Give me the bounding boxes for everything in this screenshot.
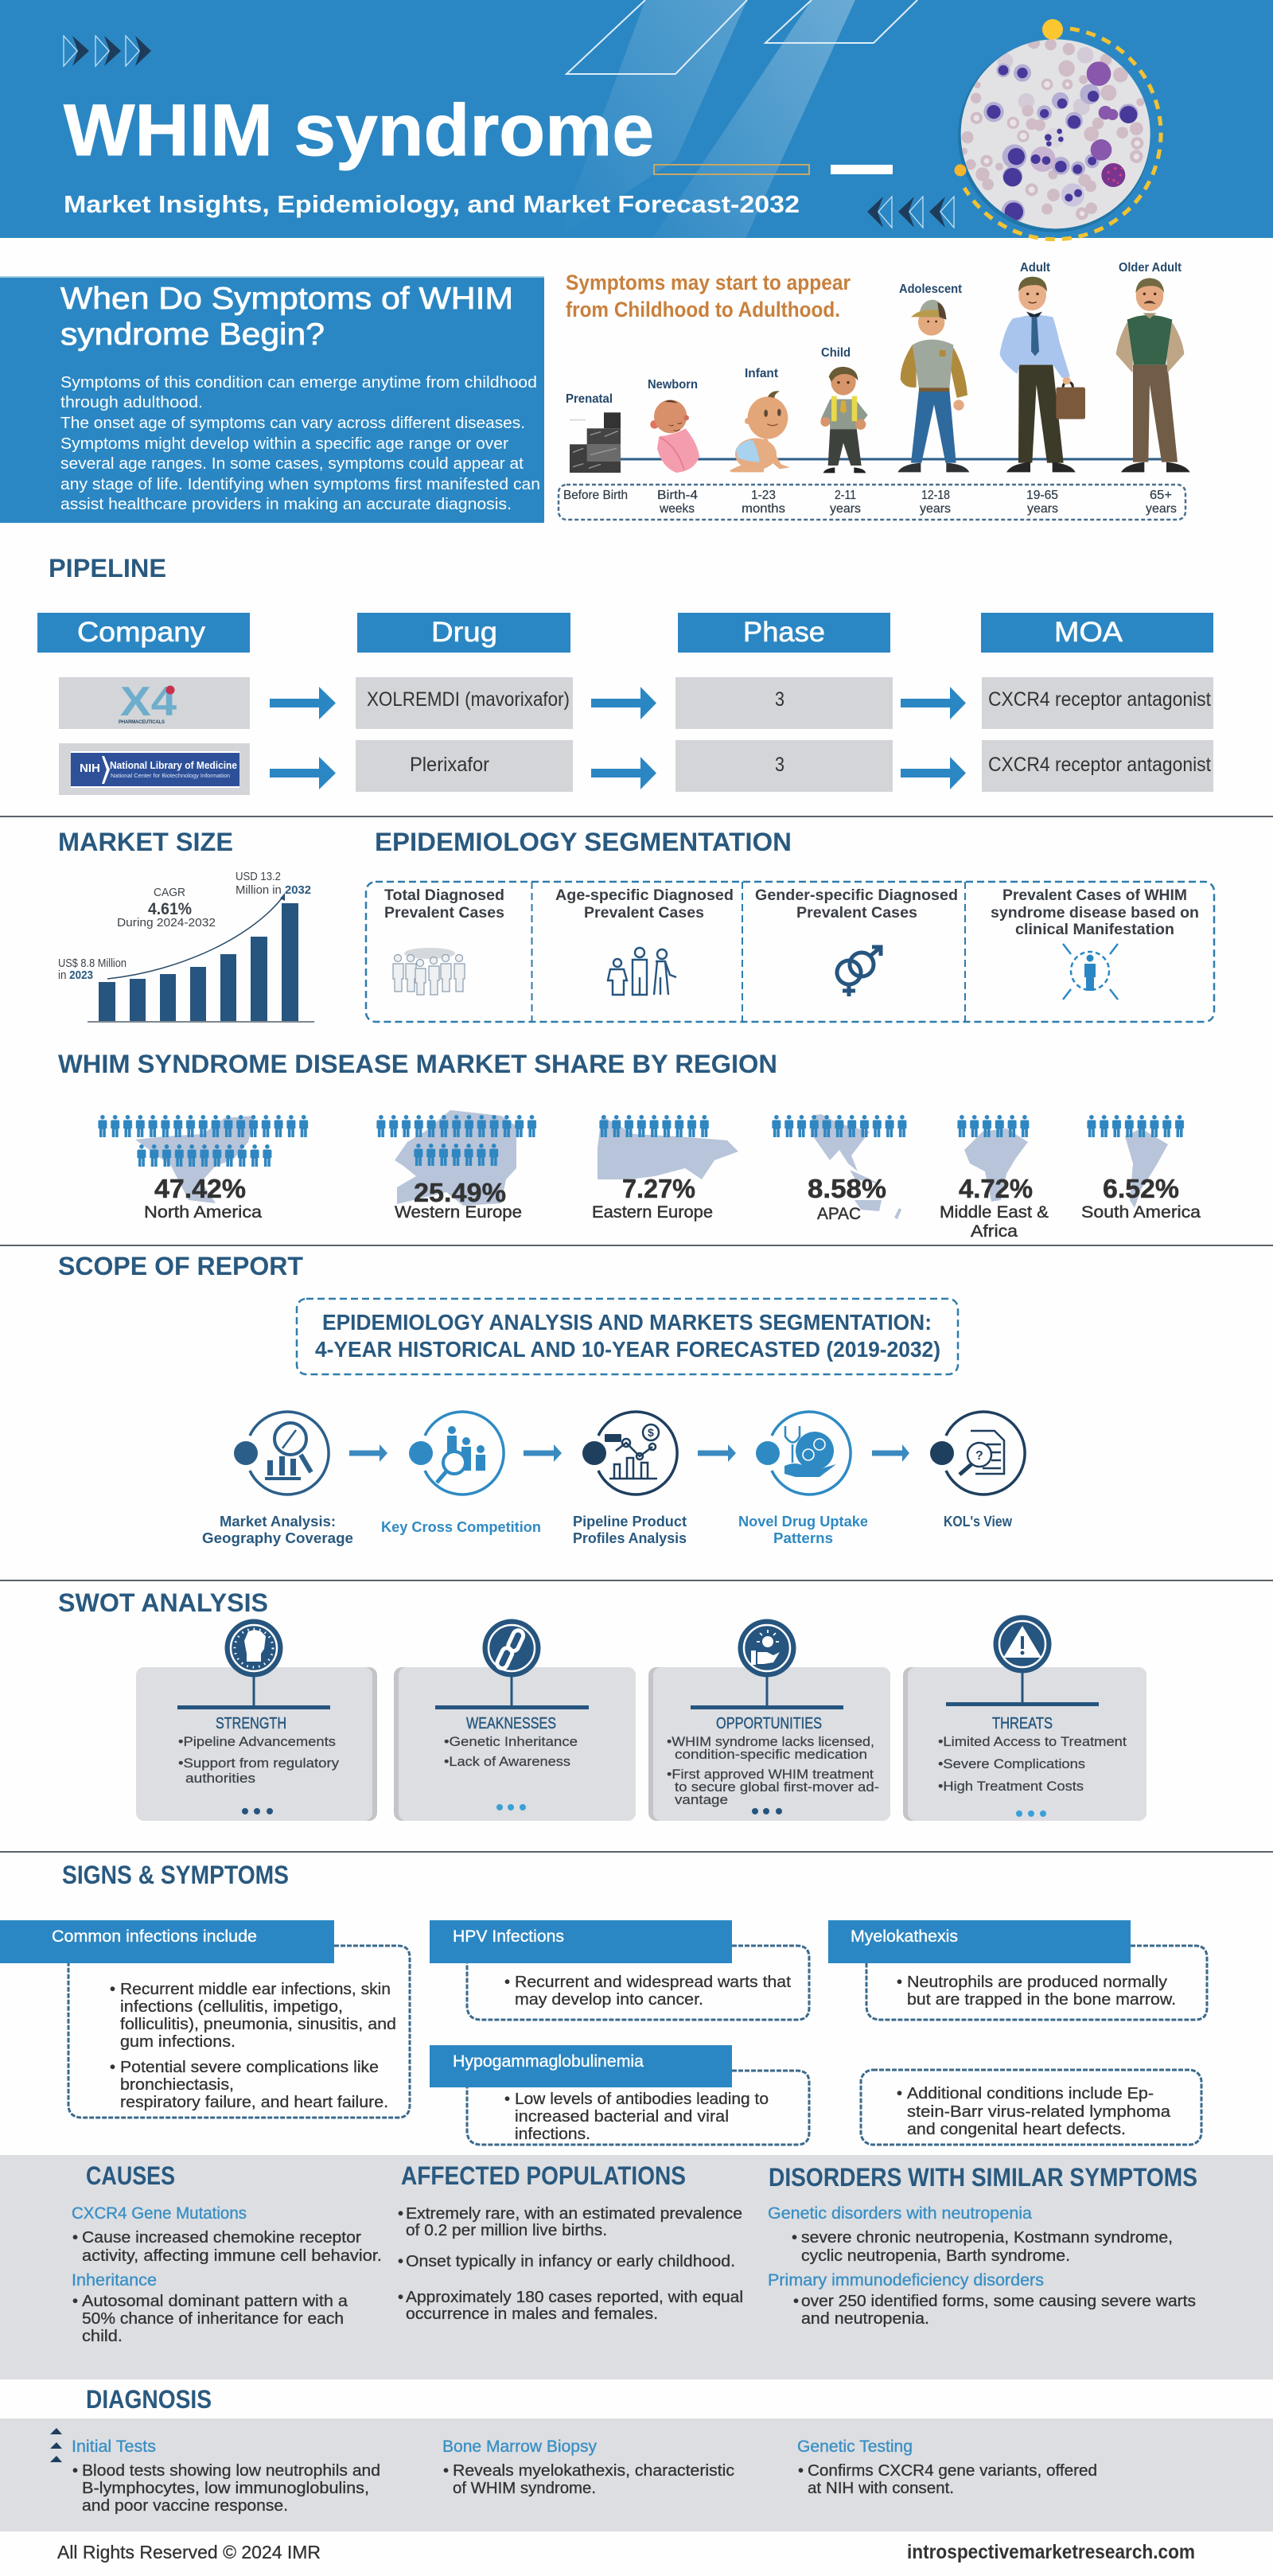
region: South America bbox=[1081, 1174, 1201, 1222]
region: Middle East and Africa: Africa bbox=[971, 1222, 1018, 1241]
icon: broken chain bbox=[482, 1619, 541, 1678]
card: common infections: bronchiectasis, bbox=[120, 2076, 234, 2094]
column: bone marrow biopsy: Reveals myelokathexis, characteristic bbox=[453, 2462, 734, 2480]
card: opportunities: OPPORTUNITIES bbox=[716, 1715, 822, 1732]
scope item: pipeline product profiles bbox=[573, 1412, 687, 1546]
card: weaknesses bbox=[394, 1619, 636, 1821]
bar chart: market size: 4.61% bbox=[148, 900, 192, 918]
bar chart: market size: CAGR bbox=[154, 886, 185, 899]
figure: newborn bbox=[650, 399, 699, 473]
region: North America: North America bbox=[144, 1202, 262, 1222]
column: genetic testing: Genetic Testing bbox=[797, 2438, 913, 2456]
logo: NIH National Library of Medicine bbox=[71, 751, 239, 788]
column: disorders with similar symptoms: DISORDERS WITH SIMILAR SYMPTOMS bbox=[769, 2163, 1197, 2192]
figure: prenatal block bbox=[570, 412, 621, 473]
callout: analysis period: EPIDEMIOLOGY ANALYSIS AND MARKETS SEGMENTATION: bbox=[322, 1310, 932, 1335]
arrow bbox=[872, 1444, 909, 1462]
age ranges dashed box: years bbox=[1027, 502, 1058, 516]
bar chart: market size: US$ 8.8 Million bbox=[58, 957, 127, 970]
card: weaknesses: WEAKNESSES bbox=[466, 1715, 556, 1732]
column: causes: child. bbox=[82, 2328, 123, 2345]
card: hypogammaglobulinemia bbox=[430, 2045, 809, 2145]
column headers: Drug bbox=[431, 617, 497, 648]
card: opportunities: to secure global first-mover ad- bbox=[675, 1780, 879, 1795]
region: Eastern Europe: 7.27% bbox=[622, 1174, 695, 1203]
column headers: Phase bbox=[743, 617, 825, 648]
card: HPV infections: Recurrent and widespread warts that bbox=[515, 1974, 791, 1991]
stage labels: Newborn bbox=[648, 378, 698, 392]
segment titles: Prevalent Cases of WHIM bbox=[1002, 887, 1187, 904]
column: disorders with similar symptoms bbox=[768, 2163, 1197, 2328]
column: causes: • bbox=[72, 2293, 78, 2310]
column: disorders with similar symptoms: • bbox=[792, 2229, 797, 2247]
subtitle: Market Insights, Epidemiology, and Market Forecast-2032 bbox=[64, 190, 800, 218]
card: strength: STRENGTH bbox=[216, 1715, 286, 1732]
scope item: pipeline product profiles: Profiles Analysis bbox=[573, 1530, 687, 1546]
card: HPV infections: may develop into cancer. bbox=[515, 1991, 703, 2009]
age ranges dashed box: years bbox=[920, 502, 951, 516]
card: opportunities: condition-specific medication bbox=[675, 1748, 867, 1762]
card: strength: •Pipeline Advancements bbox=[178, 1735, 336, 1749]
column: initial tests: B-lymphocytes, low immunoglobulins, bbox=[82, 2480, 369, 2497]
panel: when do symptoms begin bbox=[0, 276, 544, 523]
card: opportunities bbox=[648, 1619, 890, 1821]
icon: hand and light bulb bbox=[738, 1619, 796, 1678]
stage labels: Adolescent bbox=[899, 283, 963, 296]
column: genetic testing bbox=[797, 2438, 1097, 2497]
card: hypogammaglobulinemia: infections. bbox=[515, 2126, 590, 2143]
card: threats: •High Treatment Costs bbox=[938, 1779, 1084, 1794]
heading: swot analysis: SWOT ANALYSIS bbox=[58, 1588, 268, 1617]
card: common infections: respiratory failure, and heart failure. bbox=[120, 2094, 388, 2111]
orange callout heading: from Childhood to Adulthood. bbox=[566, 298, 840, 322]
card: HPV infections: HPV Infections bbox=[453, 1927, 564, 1946]
arrows: pipeline flow bbox=[270, 687, 966, 789]
card: myelokathexis bbox=[828, 1920, 1207, 2020]
card: common infections: infections (cellulitis, impetigo, bbox=[120, 1998, 343, 2016]
card: additional conditions: and congenital heart defects. bbox=[907, 2121, 1126, 2138]
scope item: pipeline product profiles: Pipeline Product bbox=[573, 1514, 687, 1530]
age ranges dashed box bbox=[559, 485, 1185, 520]
column: disorders with similar symptoms: over 250 identified forms, some causing severe warts bbox=[801, 2293, 1196, 2310]
panel: regional market share bbox=[96, 1110, 1201, 1241]
region: North America: 47.42% bbox=[154, 1174, 246, 1203]
column: bone marrow biopsy: • bbox=[443, 2462, 449, 2480]
column: causes: activity, affecting immune cell behavior. bbox=[82, 2247, 382, 2265]
scope item: key cross competition bbox=[381, 1412, 541, 1535]
region: APAC: 8.58% bbox=[808, 1174, 886, 1203]
icon: age groups family bbox=[608, 948, 676, 995]
card: threats bbox=[903, 1615, 1146, 1821]
bar chart: market size: Million in 2032 bbox=[236, 883, 311, 897]
scope item: KOL view: ? bbox=[975, 1449, 983, 1463]
scope item: market analysis: Geography Coverage bbox=[202, 1530, 353, 1546]
card: hypogammaglobulinemia: Hypogammaglobulinemia bbox=[453, 2052, 644, 2071]
heading: signs and symptoms: SIGNS & SYMPTOMS bbox=[62, 1861, 289, 1889]
card: hypogammaglobulinemia: • bbox=[504, 2091, 510, 2108]
card: common infections: Recurrent middle ear infections, skin bbox=[120, 1981, 391, 1998]
card: additional conditions: • bbox=[897, 2085, 902, 2102]
card: myelokathexis: Neutrophils are produced normally bbox=[907, 1974, 1167, 1991]
figure: child bbox=[820, 367, 868, 473]
age ranges dashed box: 12-18 bbox=[921, 489, 950, 502]
arrow bbox=[698, 1444, 736, 1462]
age ranges dashed box: Birth-4 bbox=[657, 489, 698, 502]
stage labels bbox=[566, 261, 1182, 406]
column: initial tests: Blood tests showing low neutrophils and bbox=[82, 2462, 380, 2480]
card: HPV infections: • bbox=[504, 1974, 510, 1991]
column: causes: 50% chance of inheritance for each bbox=[82, 2310, 344, 2328]
icon: crowd bbox=[393, 948, 465, 995]
column: disorders with similar symptoms: • bbox=[793, 2293, 799, 2310]
footer: introspectivemarketresearch.com bbox=[907, 2541, 1195, 2563]
column: genetic testing: at NIH with consent. bbox=[808, 2480, 954, 2497]
panel body text: assist healthcare providers in making an accurate diagnosis. bbox=[60, 495, 512, 513]
age ranges dashed box: weeks bbox=[659, 502, 695, 516]
panel body text: any stage of life. Identifying when symptoms first manifested can bbox=[60, 475, 540, 493]
card: common infections: gum infections. bbox=[120, 2033, 236, 2051]
orange callout heading: Symptoms may start to appear bbox=[566, 271, 851, 294]
row: NIH bbox=[59, 740, 1213, 795]
orange callout heading bbox=[566, 271, 851, 322]
age ranges dashed box: years bbox=[1146, 502, 1177, 516]
region: APAC: APAC bbox=[817, 1204, 861, 1223]
card: threats: •Severe Complications bbox=[938, 1757, 1085, 1771]
scope item: market analysis bbox=[202, 1412, 353, 1546]
heading: epidemiology segmentation: EPIDEMIOLOGY SEGMENTATION bbox=[375, 828, 792, 856]
row: NIH: 3 bbox=[775, 754, 784, 776]
panel body text: Symptoms of this condition can emerge anytime from childhood bbox=[60, 373, 537, 392]
card: myelokathexis: • bbox=[897, 1974, 902, 1991]
logo: NIH National Library of Medicine: National Center for Biotechnology Information bbox=[111, 774, 230, 779]
column: bone marrow biopsy bbox=[442, 2438, 734, 2497]
scope item: KOL view bbox=[930, 1412, 1025, 1530]
card: additional conditions: stein-Barr virus-related lymphoma bbox=[907, 2103, 1171, 2121]
segment titles bbox=[384, 887, 1199, 938]
column: affected populations: Extremely rare, with an estimated prevalence bbox=[406, 2205, 742, 2223]
scope item: novel drug uptake patterns: Novel Drug Uptake bbox=[738, 1514, 868, 1530]
column: disorders with similar symptoms: Genetic disorders with neutropenia bbox=[768, 2204, 1032, 2223]
row: X4 Pharmaceuticals: 3 bbox=[775, 688, 784, 711]
column: causes bbox=[72, 2161, 382, 2345]
icon: left chevrons bbox=[867, 197, 954, 228]
card: threats: •Limited Access to Treatment bbox=[938, 1735, 1127, 1749]
panel: epidemiology segmentation bbox=[366, 882, 1214, 1022]
panel heading bbox=[60, 282, 513, 352]
age ranges dashed box: Before Birth bbox=[563, 489, 628, 502]
card: common infections: Common infections include bbox=[52, 1927, 257, 1946]
callout: analysis period bbox=[297, 1299, 958, 1374]
icon: person in circle bbox=[1063, 944, 1118, 1000]
row: X4 Pharmaceuticals: CXCR4 receptor antagonist bbox=[988, 688, 1211, 711]
footer bbox=[57, 2541, 1195, 2563]
column: causes: • bbox=[72, 2229, 78, 2247]
age ranges dashed box: years bbox=[830, 502, 861, 516]
figure: adolescent bbox=[897, 300, 969, 472]
card: additional conditions bbox=[861, 2070, 1201, 2145]
column headers: Company bbox=[77, 617, 206, 648]
people pictograms bbox=[96, 1115, 1185, 1167]
figure: adult bbox=[1000, 277, 1085, 472]
card: opportunities: •WHIM syndrome lacks licensed, bbox=[667, 1735, 874, 1749]
card: opportunities: vantage bbox=[675, 1793, 728, 1807]
card: common infections: • bbox=[110, 2059, 115, 2076]
card: strength bbox=[136, 1619, 377, 1821]
card: common infections: folliculitis), pneumonia, sinusitis, and bbox=[120, 2016, 396, 2033]
column: causes: Autosomal dominant pattern with a bbox=[82, 2293, 348, 2310]
region: Western Europe bbox=[395, 1178, 522, 1222]
card: common infections: • bbox=[110, 1981, 115, 1998]
column: affected populations: of 0.2 per million live births. bbox=[406, 2222, 607, 2239]
scope item: novel drug uptake patterns: Patterns bbox=[773, 1530, 833, 1546]
bar chart: market size: USD 13.2 bbox=[236, 870, 281, 883]
region: Western Europe: Western Europe bbox=[395, 1202, 522, 1222]
column: initial tests bbox=[72, 2438, 380, 2515]
card: strength: authorities bbox=[185, 1771, 255, 1786]
icon: right chevrons bbox=[64, 36, 151, 66]
segment titles: clinical Manifestation bbox=[1015, 922, 1174, 938]
logo: X4: PHARMACEUTICALS bbox=[119, 720, 165, 725]
column: bone marrow biopsy: Bone Marrow Biopsy bbox=[442, 2438, 597, 2456]
logo: NIH National Library of Medicine: NIH bbox=[80, 762, 100, 775]
pipeline table bbox=[37, 613, 1213, 795]
region: Middle East and Africa: Middle East & bbox=[940, 1202, 1049, 1222]
column: causes: Inheritance bbox=[72, 2271, 157, 2290]
icon: stacked triangles bbox=[50, 2428, 62, 2462]
title: WHIM syndrome bbox=[64, 90, 654, 171]
card: threats: THREATS bbox=[992, 1715, 1053, 1732]
decorative bars bbox=[654, 165, 893, 174]
region: Middle East and Africa bbox=[940, 1174, 1049, 1241]
segment titles: Prevalent Cases bbox=[796, 905, 917, 922]
column headers: MOA bbox=[1054, 617, 1123, 648]
card: myelokathexis: but are trapped in the bone marrow. bbox=[907, 1991, 1176, 2009]
column: affected populations: Onset typically in infancy or early childhood. bbox=[406, 2253, 735, 2270]
column: causes: CXCR4 Gene Mutations bbox=[72, 2204, 247, 2223]
card: hypogammaglobulinemia: increased bacterial and viral bbox=[515, 2108, 729, 2126]
scope item: pipeline product profiles: $ bbox=[648, 1426, 654, 1439]
heading: scope of report: SCOPE OF REPORT bbox=[58, 1252, 303, 1280]
card: HPV infections bbox=[430, 1920, 809, 2020]
column: disorders with similar symptoms: cyclic neutropenia, Barth syndrome. bbox=[801, 2247, 1070, 2265]
card: weaknesses: •Lack of Awareness bbox=[444, 1755, 570, 1769]
age stage timeline bbox=[559, 261, 1190, 520]
heading: market size: MARKET SIZE bbox=[58, 828, 233, 856]
panel body text: several age ranges. In some cases, symptoms could appear at bbox=[60, 454, 524, 473]
footer: All Rights Reserved © 2024 IMR bbox=[57, 2542, 321, 2562]
column: initial tests: and poor vaccine response. bbox=[82, 2497, 288, 2515]
panel body text bbox=[60, 373, 540, 513]
card: opportunities: •First approved WHIM treatment bbox=[667, 1767, 874, 1782]
row: X4 Pharmaceuticals bbox=[59, 677, 1213, 729]
arrow bbox=[524, 1444, 562, 1462]
column: initial tests: • bbox=[72, 2462, 78, 2480]
bar chart: market size bbox=[58, 870, 314, 1023]
age ranges dashed box: 2-11 bbox=[835, 489, 856, 502]
segment titles: Prevalent Cases bbox=[584, 905, 704, 922]
callout: analysis period: 4-YEAR HISTORICAL AND 10-YEAR FORECASTED (2019-2032) bbox=[315, 1337, 940, 1362]
column: affected populations: occurrence in males and females. bbox=[406, 2305, 658, 2323]
column: genetic testing: • bbox=[798, 2462, 804, 2480]
segment titles: Age-specific Diagnosed bbox=[555, 887, 734, 904]
column: genetic testing: Confirms CXCR4 gene variants, offered bbox=[808, 2462, 1097, 2480]
heading: market share by region: WHIM SYNDROME DISEASE MARKET SHARE BY REGION bbox=[58, 1050, 777, 1078]
panel heading: When Do Symptoms of WHIM bbox=[60, 282, 513, 316]
figure: older adult bbox=[1116, 278, 1190, 472]
heading: pipeline: PIPELINE bbox=[49, 554, 166, 583]
logo: NIH National Library of Medicine: National Library of Medicine bbox=[110, 759, 237, 771]
column: causes: CAUSES bbox=[86, 2161, 175, 2190]
stage labels: Child bbox=[821, 346, 851, 360]
scope item: market analysis: Market Analysis: bbox=[220, 1514, 336, 1530]
bar chart: market size: in 2023 bbox=[58, 968, 93, 982]
card: hypogammaglobulinemia: Low levels of antibodies leading to bbox=[515, 2091, 769, 2108]
segment titles: Total Diagnosed bbox=[384, 887, 504, 904]
column: causes: Cause increased chemokine receptor bbox=[82, 2229, 361, 2247]
panel: causes, populations, similar disorders bbox=[0, 2155, 1273, 2379]
column: affected populations bbox=[398, 2161, 743, 2323]
card: myelokathexis: Myelokathexis bbox=[851, 1927, 958, 1946]
age ranges dashed box: 19-65 bbox=[1026, 489, 1058, 502]
header banner bbox=[0, 0, 1273, 242]
region: Eastern Europe: Eastern Europe bbox=[592, 1202, 713, 1222]
region: APAC bbox=[808, 1174, 886, 1223]
scope item: KOL view: KOL's View bbox=[944, 1514, 1013, 1530]
column: disorders with similar symptoms: severe chronic neutropenia, Kostmann syndrome, bbox=[801, 2229, 1173, 2247]
stage labels: Older Adult bbox=[1119, 261, 1182, 275]
region: Middle East and Africa: 4.72% bbox=[959, 1174, 1033, 1203]
region: South America: South America bbox=[1081, 1202, 1201, 1222]
row: NIH: CXCR4 receptor antagonist bbox=[988, 754, 1211, 776]
age ranges dashed box: 1-23 bbox=[751, 489, 776, 502]
blood smear microscope image bbox=[955, 19, 1161, 240]
bar chart: market size: During 2024-2032 bbox=[117, 916, 216, 929]
column: bone marrow biopsy: of WHIM syndrome. bbox=[453, 2480, 596, 2497]
card: common infections: Potential severe complications like bbox=[120, 2059, 379, 2076]
world map silhouettes bbox=[135, 1110, 1168, 1219]
column: affected populations: AFFECTED POPULATIONS bbox=[401, 2161, 686, 2190]
scope item: novel drug uptake patterns bbox=[738, 1412, 868, 1546]
arrow bbox=[349, 1444, 387, 1462]
segment titles: syndrome disease based on bbox=[991, 905, 1199, 922]
card: common infections bbox=[0, 1920, 410, 2118]
card: additional conditions: Additional conditions include Ep- bbox=[907, 2085, 1154, 2102]
age ranges dashed box: 65+ bbox=[1150, 489, 1172, 502]
row: NIH: Plerixafor bbox=[410, 754, 489, 776]
panel body text: The onset age of symptoms can vary across different diseases. bbox=[60, 414, 525, 432]
column: initial tests: Initial Tests bbox=[72, 2438, 156, 2456]
icon: gender symbols bbox=[834, 947, 881, 996]
column: affected populations: • bbox=[398, 2253, 403, 2270]
segment titles: Prevalent Cases bbox=[384, 905, 504, 922]
column: affected populations: • bbox=[398, 2205, 403, 2223]
region: South America: 6.52% bbox=[1103, 1174, 1179, 1203]
region: Eastern Europe bbox=[592, 1174, 713, 1222]
column: affected populations: Approximately 180 cases reported, with equal bbox=[406, 2289, 743, 2306]
column headers bbox=[37, 613, 1213, 653]
column: disorders with similar symptoms: and neutropenia. bbox=[801, 2310, 929, 2328]
region: Western Europe: 25.49% bbox=[414, 1178, 506, 1207]
icon: fist bbox=[224, 1619, 283, 1678]
age ranges dashed box: months bbox=[742, 502, 785, 516]
region: North America bbox=[144, 1174, 262, 1222]
stage labels: Infant bbox=[745, 367, 779, 380]
panel: diagnosis bbox=[0, 2418, 1273, 2531]
card: weaknesses: •Genetic Inheritance bbox=[444, 1735, 578, 1749]
column: affected populations: • bbox=[398, 2289, 403, 2306]
logo: X4: X4 bbox=[120, 679, 177, 725]
card: strength: •Support from regulatory bbox=[178, 1756, 340, 1771]
panel body text: through adulthood. bbox=[60, 393, 203, 411]
stage labels: Prenatal bbox=[566, 392, 613, 406]
row: X4 Pharmaceuticals: XOLREMDI (mavorixafor) bbox=[367, 688, 570, 711]
segment titles: Gender-specific Diagnosed bbox=[755, 887, 958, 904]
scope item: key cross competition: Key Cross Competition bbox=[381, 1519, 541, 1535]
heading: diagnosis: DIAGNOSIS bbox=[86, 2385, 212, 2414]
stage labels: Adult bbox=[1020, 261, 1051, 275]
column: disorders with similar symptoms: Primary immunodeficiency disorders bbox=[768, 2271, 1044, 2290]
icon: warning triangle bbox=[993, 1615, 1052, 1673]
panel body text: Symptoms might develop within a specific age range or over bbox=[60, 435, 508, 453]
figure: infant bbox=[730, 391, 790, 472]
panel heading: syndrome Begin? bbox=[60, 318, 325, 352]
